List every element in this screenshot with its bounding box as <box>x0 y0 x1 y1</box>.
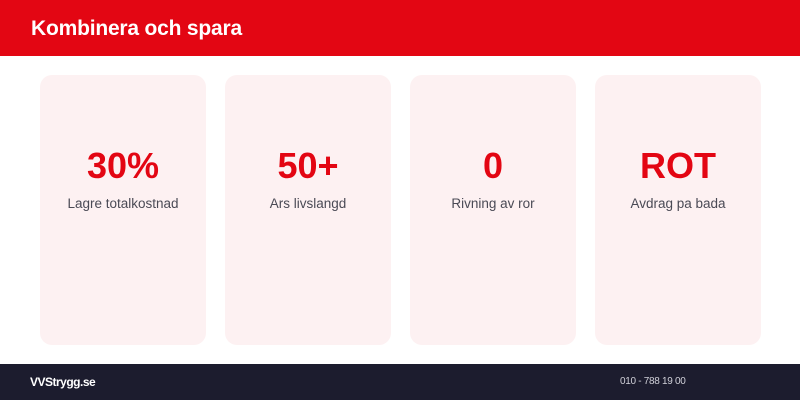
header <box>0 0 800 56</box>
title: Kombinera och spara <box>31 17 242 40</box>
stat label: Rivning av ror <box>451 196 535 211</box>
footer <box>0 364 800 400</box>
card: 0 <box>410 75 576 345</box>
card: ROT <box>595 75 761 345</box>
stat number: 50+ <box>277 145 339 186</box>
phone: 010 - 788 19 00 <box>620 376 686 387</box>
stat number: 0 <box>483 145 503 186</box>
stat label: Avdrag pa bada <box>630 196 726 211</box>
stat label: Lagre totalkostnad <box>67 196 179 211</box>
stat number: ROT <box>640 145 716 186</box>
brand: VVStrygg.se <box>30 375 95 389</box>
card: 50+ <box>225 75 391 345</box>
card: 30% <box>40 75 206 345</box>
stat label: Ars livslangd <box>270 196 346 211</box>
stat number: 30% <box>87 145 159 186</box>
